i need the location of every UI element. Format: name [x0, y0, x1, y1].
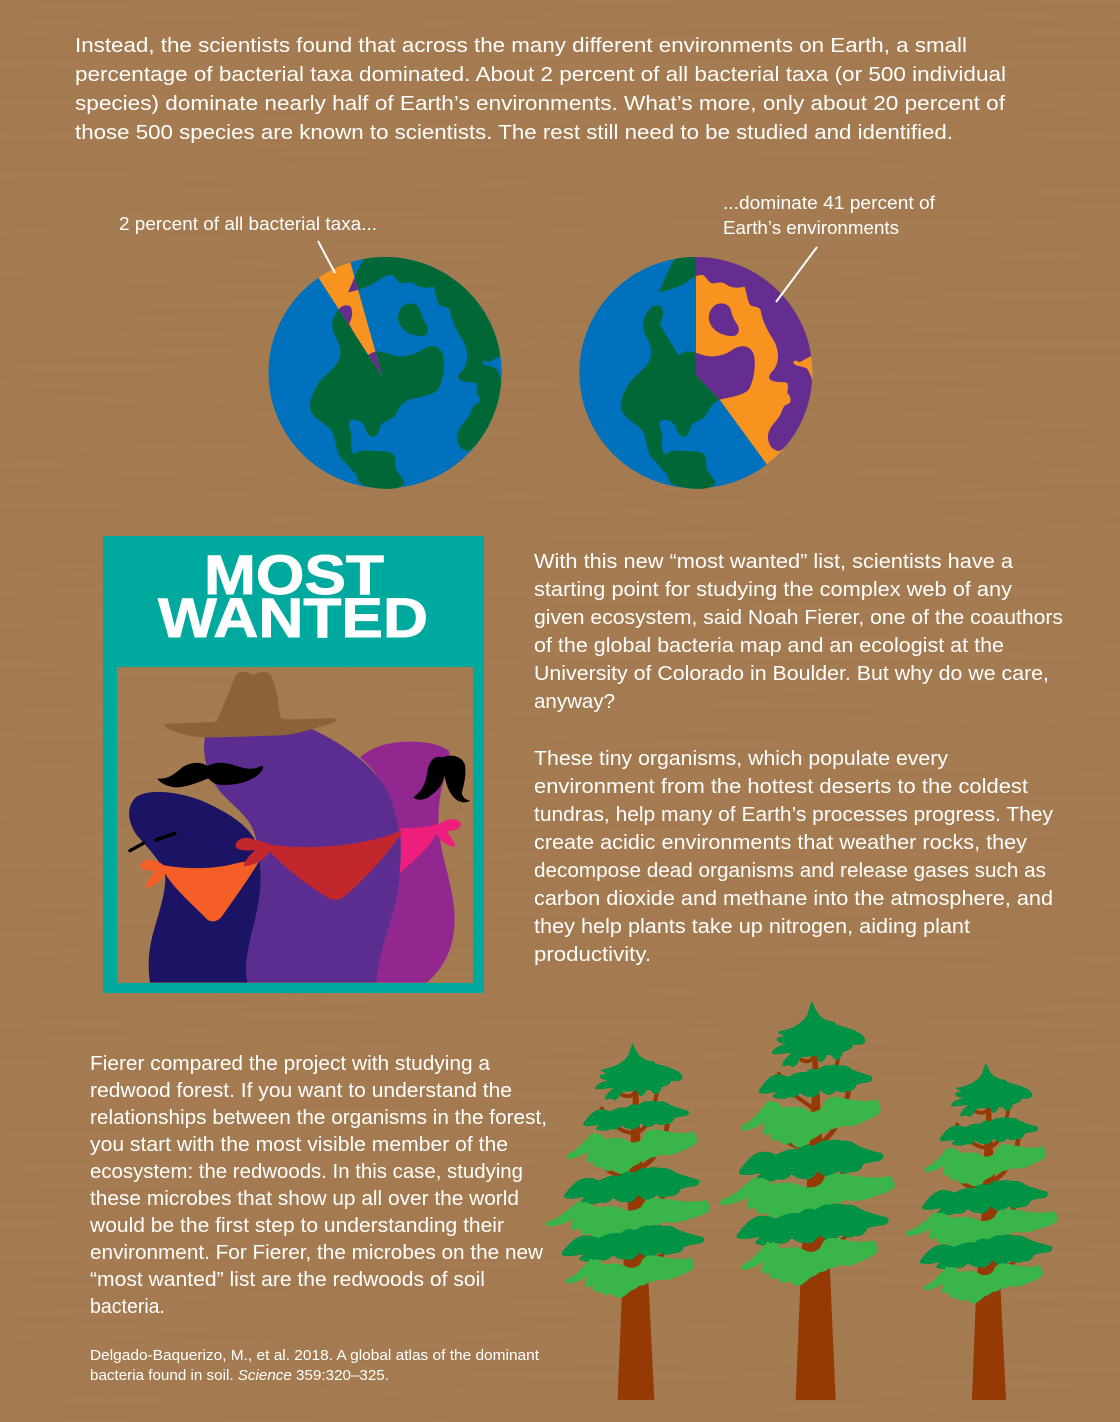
tree: middle redwood — [722, 1001, 893, 1400]
glasses — [130, 833, 175, 851]
text block: redwood forest: environment. For Fierer, the microbes on the new — [90, 1241, 543, 1264]
label: 2 percent of all bacterial taxa: 2 percent of all bacterial taxa... — [119, 214, 377, 234]
intro text: percentage of bacterial taxa dominated. About 2 percent of all bacterial taxa (or 500 individual — [75, 63, 1006, 86]
bandana: orange — [140, 860, 258, 921]
text block: redwood forest — [89, 1052, 547, 1318]
callout line: right globe — [776, 247, 817, 302]
panel: most wanted poster — [103, 536, 484, 993]
text block: redwood forest: ecosystem: the redwoods. In this case, studying — [90, 1160, 523, 1183]
tree: left redwood — [548, 1043, 708, 1400]
poster heading — [158, 543, 428, 649]
poster heading: WANTED — [158, 586, 428, 649]
text block: most wanted list — [534, 550, 1063, 713]
text block: redwood forest: you start with the most visible member of the — [90, 1133, 508, 1156]
intro text — [75, 34, 1006, 144]
poster frame — [103, 536, 484, 993]
globe: 41 percent sector — [579, 250, 816, 489]
tree: right redwood — [907, 1063, 1056, 1400]
illustration: bacteria outlaws — [129, 672, 470, 983]
text block: tiny organisms: environment from the hottest deserts to the coldest — [534, 775, 1028, 798]
text block: tiny organisms: tundras, help many of Earth’s processes progress. They — [534, 803, 1054, 826]
callout line: left globe — [318, 241, 335, 273]
cowboy hat — [163, 672, 337, 737]
poster heading: MOST — [204, 543, 384, 606]
text block: most wanted list: starting point for studying the complex web of any — [534, 578, 1013, 601]
text block: redwood forest: would be the first step to understanding their — [89, 1214, 504, 1237]
text block: most wanted list: of the global bacteria map and an ecologist at the — [534, 634, 1004, 657]
text block: tiny organisms: These tiny organisms, which populate every — [534, 747, 949, 770]
text block: tiny organisms: carbon dioxide and methane into the atmosphere, and — [534, 887, 1053, 910]
text block: tiny organisms: productivity. — [534, 943, 651, 966]
bacterium: right magenta — [360, 742, 455, 983]
text block: most wanted list: University of Colorado in Boulder. But why do we care, — [534, 662, 1049, 685]
intro text: those 500 species are known to scientists. The rest still need to be studied and identified. — [75, 121, 953, 144]
text block: tiny organisms: create acidic environments that weather rocks, they — [534, 831, 1028, 854]
label: dominate 41 percent of environments: Earth’s environments — [723, 218, 899, 238]
citation: Delgado-Baquerizo, M., et al. 2018. A global atlas of the dominant — [90, 1348, 539, 1364]
label: dominate 41 percent of environments: ...dominate 41 percent of — [723, 193, 936, 213]
text block: redwood forest: “most wanted” list are the redwoods of soil — [90, 1268, 485, 1291]
label: dominate 41 percent of environments — [723, 193, 936, 238]
citation — [90, 1348, 539, 1384]
text block: most wanted list: anyway? — [534, 690, 615, 713]
text block: tiny organisms: they help plants take up nitrogen, aiding plant — [534, 915, 970, 938]
text block: redwood forest: these microbes that show up all over the world — [90, 1187, 519, 1210]
text block: tiny organisms — [534, 747, 1054, 966]
text block: redwood forest: relationships between the organisms in the forest, — [90, 1106, 547, 1129]
intro text: species) dominate nearly half of Earth’s environments. What’s more, only about 20 percent of — [75, 92, 1005, 115]
handlebar moustache on magenta bacterium — [413, 756, 470, 802]
text block: tiny organisms: decompose dead organisms and release gases such as — [534, 859, 1046, 882]
bacterium: left navy — [129, 792, 261, 983]
bacterium: middle purple — [204, 728, 401, 983]
bandana: red — [236, 830, 403, 900]
mustache — [157, 763, 263, 787]
text block: redwood forest: Fierer compared the project with studying a — [90, 1052, 491, 1075]
text block: redwood forest: redwood forest. If you want to understand the — [90, 1079, 512, 1102]
text block: most wanted list: With this new “most wanted” list, scientists have a — [534, 550, 1014, 573]
text block: redwood forest: bacteria. — [90, 1295, 165, 1318]
globe: 2 percent wedge — [268, 250, 505, 489]
text block: most wanted list: given ecosystem, said Noah Fierer, one of the coauthors — [534, 606, 1063, 629]
citation: bacteria found in soil. Science 359:320–325. — [90, 1368, 389, 1384]
bandana: pink — [399, 819, 461, 873]
intro text: Instead, the scientists found that across the many different environments on Earth, a small — [75, 34, 967, 57]
